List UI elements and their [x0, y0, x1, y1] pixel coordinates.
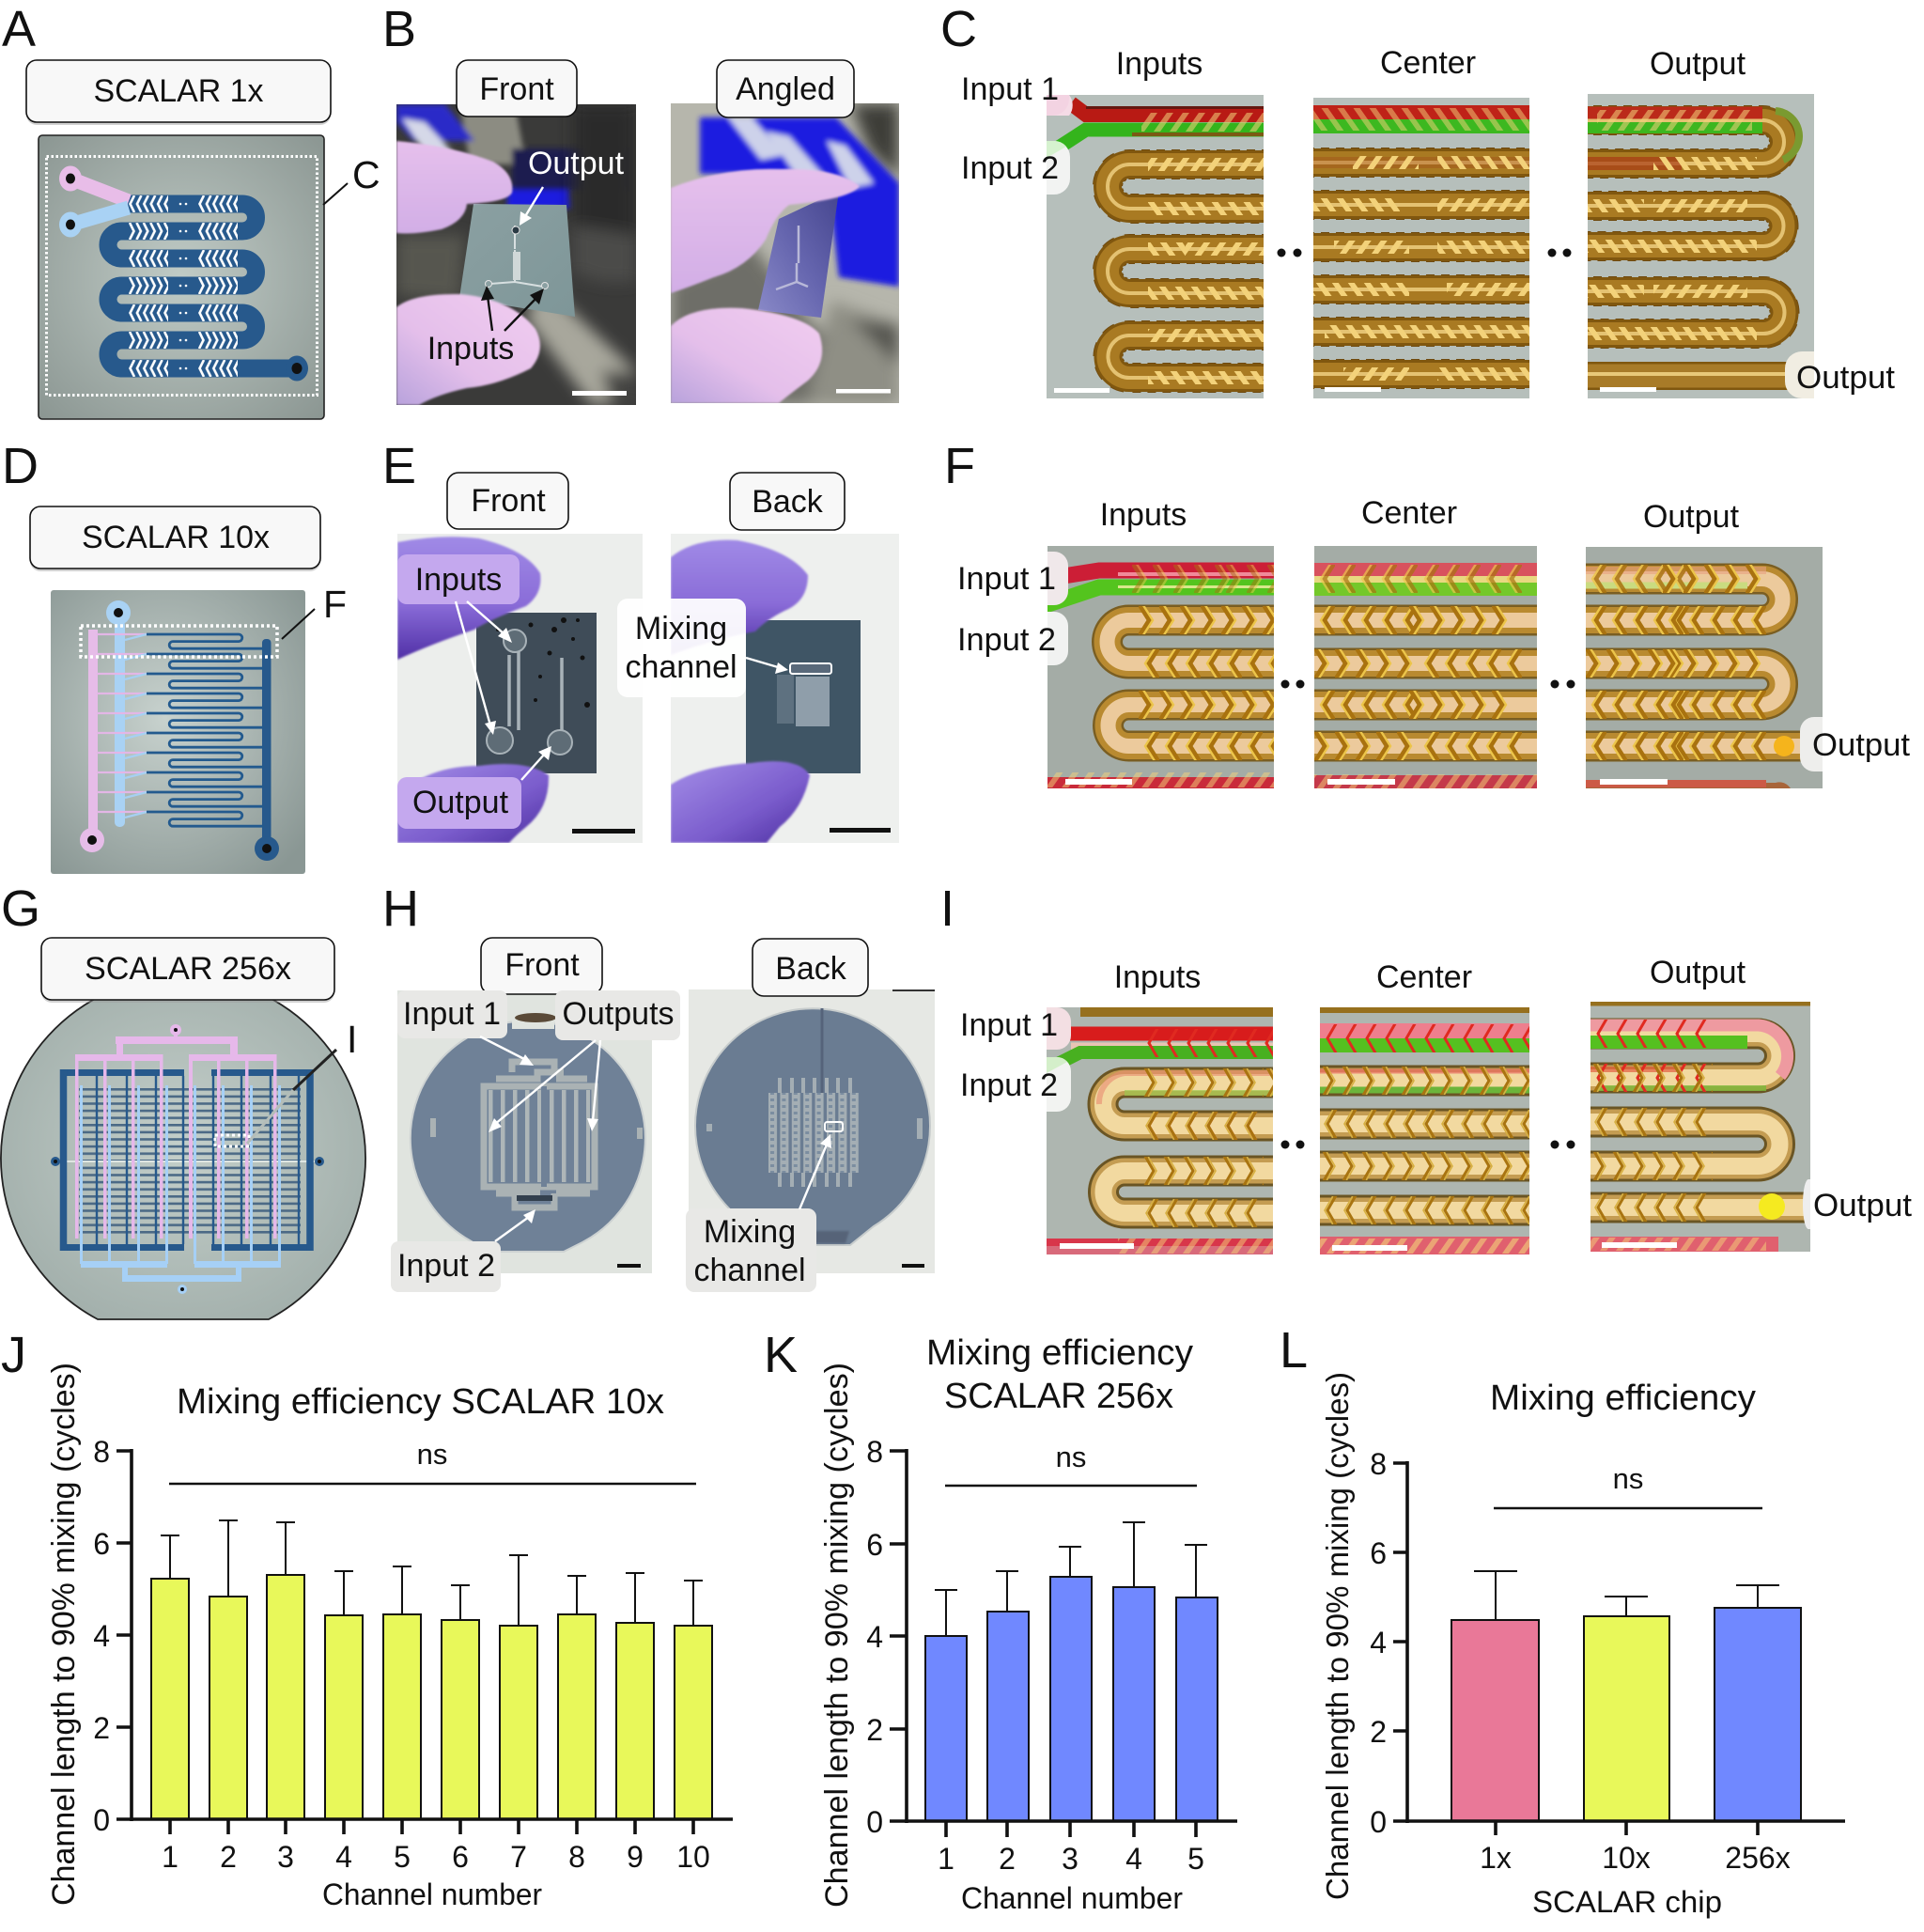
tick labels: 4: [335, 1840, 352, 1874]
heading box: SCALAR 256x: SCALAR 256x: [85, 951, 291, 987]
tick labels: 4: [1370, 1626, 1387, 1659]
scale bars: [1065, 779, 1668, 785]
photo: back: [689, 939, 935, 1273]
panel letter A: A: [2, 1, 36, 57]
label: Front: Front: [504, 947, 580, 983]
label: Input 2: Input 2: [957, 622, 1056, 658]
bars with error bars: [151, 1520, 712, 1819]
micrograph: center: [1306, 98, 1541, 398]
label: Output: Output: [1812, 727, 1911, 763]
tick labels: 6: [93, 1527, 110, 1561]
label: Back: [753, 939, 868, 996]
callout F: [282, 583, 347, 639]
label: Back: Back: [752, 484, 824, 520]
heading box: SCALAR 10x: [30, 506, 320, 571]
label: Back: [730, 473, 845, 530]
scale bars: [1060, 1242, 1677, 1251]
tick labels: 1: [162, 1840, 178, 1874]
label: Input 2: [957, 612, 1068, 665]
panel letter F: F: [944, 438, 975, 494]
axes: [890, 1449, 1237, 1837]
label: Output: [1803, 1179, 1913, 1229]
x axis title: Channel number: [961, 1881, 1183, 1915]
label: Mixing channel with arrow: Mixing: [635, 611, 727, 647]
micrograph: output: [1578, 94, 1818, 398]
chart title: [926, 1333, 1193, 1416]
tick labels: 1: [938, 1842, 954, 1876]
label: Outputs with arrows: [489, 990, 680, 1132]
panel letter D: D: [2, 438, 39, 494]
label: Mixing channel with arrow: [686, 1122, 843, 1292]
tick labels: 2: [220, 1840, 237, 1874]
scale bars: [617, 1264, 924, 1268]
column headings: [1116, 45, 1746, 82]
ellipsis dots: [1278, 248, 1571, 257]
chart title: Mixing efficiency: [1490, 1379, 1756, 1418]
panel B: photos of 1x chip: [382, 1, 899, 405]
tick labels: 8: [866, 1435, 883, 1469]
label: Output: [1785, 351, 1896, 398]
tick labels: 10x: [1602, 1841, 1651, 1875]
significance: ns: ns: [417, 1438, 447, 1471]
heading box: SCALAR 1x: SCALAR 1x: [94, 73, 263, 109]
panel letter B: B: [382, 1, 416, 57]
annotation: Inputs with arrows: Inputs: [427, 331, 514, 366]
tick labels: 0: [866, 1805, 883, 1839]
callout F: F: [323, 583, 347, 626]
column headings: Inputs: [1114, 959, 1201, 995]
callout I: I: [347, 1018, 357, 1061]
label: Input 2: [960, 1057, 1071, 1112]
tick labels: 2: [93, 1711, 110, 1745]
photo: back: [671, 473, 899, 843]
panel G: SCALAR 256x wafer: [1, 880, 365, 1319]
y axis title: Channel length to 90% mixing (cycles): [819, 1363, 855, 1908]
panel letter C: C: [940, 1, 977, 57]
micrograph: center: [1306, 546, 1550, 788]
column headings: Center: [1361, 495, 1457, 531]
heading box: SCALAR 256x: [41, 938, 334, 1003]
label: Input 2 with arrow: [391, 1209, 535, 1292]
label: Mixing channel with arrow: Mixing: [704, 1214, 796, 1250]
heading box: SCALAR 10x: SCALAR 10x: [82, 520, 270, 555]
label: Inputs with arrows: [397, 554, 520, 735]
label: Input 1 with arrow: Input 1: [403, 996, 501, 1032]
tick labels: 4: [866, 1620, 883, 1654]
column headings: Center: [1376, 959, 1472, 995]
label: Input 2: [961, 141, 1070, 195]
panel K: bar chart 256x: [764, 1327, 1237, 1915]
annotation: Output with arrow: Output: [528, 146, 625, 181]
callout I: [247, 1018, 357, 1144]
x axis title: Channel number: [322, 1877, 542, 1911]
tick labels: 3: [277, 1840, 294, 1874]
tick labels: 2: [999, 1842, 1016, 1876]
label: Input 2 with arrow: Input 2: [397, 1248, 495, 1284]
label: Output: Output: [1796, 360, 1896, 396]
ellipsis dots: [1281, 680, 1575, 688]
label: Input 2: Input 2: [961, 150, 1059, 186]
tick labels: 0: [1370, 1805, 1387, 1839]
chip schematic: [51, 590, 305, 874]
panel L: bar chart comparison: [1280, 1322, 1845, 1919]
column headings: [1114, 955, 1746, 995]
tick labels: 2: [866, 1713, 883, 1747]
tick labels: 6: [452, 1840, 469, 1874]
panel A: SCALAR 1x schematic: [2, 1, 380, 419]
label: Front: Front: [471, 483, 546, 519]
panel I: micrographs 256x: [940, 880, 1913, 1254]
label: Mixing channel with arrow: channel: [625, 649, 737, 685]
label: Angled: [717, 60, 854, 117]
callout C: [323, 153, 380, 205]
label: Output with arrow: Output: [412, 785, 509, 820]
chip schematic: [39, 135, 324, 419]
tick labels: 5: [394, 1840, 411, 1874]
chart title: SCALAR 256x: [944, 1377, 1173, 1416]
chart title: Mixing efficiency SCALAR 10x: [177, 1382, 664, 1422]
label: Output with arrow: [397, 746, 551, 829]
label: Front: [447, 473, 568, 529]
label: Outputs with arrows: Outputs: [562, 996, 675, 1032]
chart title: Mixing efficiency: [926, 1333, 1193, 1373]
label: Input 1 with arrow: [397, 990, 534, 1066]
label: Mixing channel with arrow: channel: [693, 1253, 806, 1288]
heading box: SCALAR 1x: [26, 60, 331, 125]
panel letter K: K: [764, 1327, 798, 1383]
tick labels: 2: [1370, 1715, 1387, 1749]
axes: [1393, 1461, 1845, 1835]
tick labels: 8: [568, 1840, 585, 1874]
panel D: SCALAR 10x schematic: [2, 438, 347, 874]
column headings: [1100, 495, 1740, 535]
micrograph: inputs: [1047, 546, 1274, 788]
tick labels: 4: [93, 1619, 110, 1653]
panel E: photos of 10x chip: [382, 438, 899, 843]
label: Front: [457, 60, 577, 117]
photo: front: [397, 473, 643, 843]
annotation: Output with arrow: [520, 146, 625, 226]
x axis title: SCALAR chip: [1532, 1885, 1722, 1919]
tick labels: 10: [676, 1840, 710, 1874]
annotation: Inputs with arrows: [427, 286, 544, 366]
tick labels: 5: [1187, 1842, 1204, 1876]
column headings: Inputs: [1116, 46, 1202, 82]
column headings: Output: [1650, 955, 1746, 990]
column headings: Inputs: [1100, 497, 1187, 533]
label: Output: Output: [1813, 1188, 1913, 1223]
label: Input 2: Input 2: [960, 1067, 1058, 1103]
label: Inputs with arrows: Inputs: [415, 562, 502, 598]
tick labels: 7: [510, 1840, 527, 1874]
y axis title: Channel length to 90% mixing (cycles): [46, 1363, 82, 1906]
tick labels: 9: [627, 1840, 644, 1874]
tick labels: 8: [1370, 1447, 1387, 1481]
bars with error bars: [1451, 1571, 1801, 1821]
tick labels: 3: [1062, 1842, 1078, 1876]
label: Input 1: Input 1: [960, 1007, 1058, 1043]
micrograph: inputs: [1047, 95, 1274, 398]
ellipsis dots: [1281, 1141, 1575, 1148]
tick labels: 4: [1125, 1842, 1142, 1876]
panel J: bar chart 10x: [1, 1327, 733, 1911]
tick labels: 8: [93, 1435, 110, 1469]
photo: angled: [671, 60, 899, 404]
label: Angled: Angled: [736, 71, 835, 107]
panel letter G: G: [1, 880, 40, 937]
significance: ns: ns: [1056, 1441, 1086, 1473]
label: Mixing channel with arrow: [617, 599, 831, 697]
bars with error bars: [925, 1522, 1218, 1821]
photo: front: [396, 60, 636, 405]
label: Input 1: Input 1: [961, 71, 1059, 107]
tick labels: 6: [1370, 1536, 1387, 1570]
tick labels: 0: [93, 1803, 110, 1837]
tick labels: [93, 1435, 710, 1874]
column headings: Center: [1380, 45, 1476, 81]
label: Input 1: Input 1: [957, 561, 1056, 597]
micrograph: inputs: [1047, 1007, 1273, 1254]
axes: [116, 1449, 733, 1834]
scale bars: [572, 828, 891, 834]
scale bars: [572, 389, 891, 396]
tick labels: [866, 1435, 1204, 1876]
label: Back: Back: [775, 951, 847, 987]
micrograph: center: [1320, 1007, 1529, 1254]
panel C: micrographs 1x: [940, 1, 1896, 398]
label: Input 1: [957, 552, 1068, 605]
micrograph: output: [1578, 547, 1827, 799]
panel letter H: H: [382, 880, 419, 937]
micrograph: output: [1583, 1002, 1818, 1252]
callout C: C: [352, 153, 380, 196]
label: Front: Front: [479, 71, 554, 107]
label: Output: [1800, 717, 1911, 771]
panel letter J: J: [1, 1327, 26, 1383]
tick labels: 256x: [1725, 1841, 1791, 1875]
panel F: micrographs 10x: [944, 438, 1911, 799]
panel letter L: L: [1280, 1322, 1308, 1379]
y axis title: Channel length to 90% mixing (cycles): [1320, 1372, 1355, 1900]
wafer schematic: [1, 976, 365, 1319]
label: Front: [481, 938, 602, 994]
panel letter I: I: [940, 880, 954, 937]
significance: ns: ns: [1613, 1462, 1643, 1495]
column headings: Output: [1643, 499, 1740, 535]
scale bars: [1054, 387, 1656, 393]
tick labels: [1370, 1447, 1791, 1875]
tick labels: 1x: [1480, 1841, 1512, 1875]
panel letter E: E: [382, 438, 416, 494]
photo: front: [397, 938, 652, 1273]
tick labels: 6: [866, 1528, 883, 1562]
column headings: Output: [1650, 46, 1746, 82]
panel H: photos of 256x wafer: [382, 880, 935, 1292]
